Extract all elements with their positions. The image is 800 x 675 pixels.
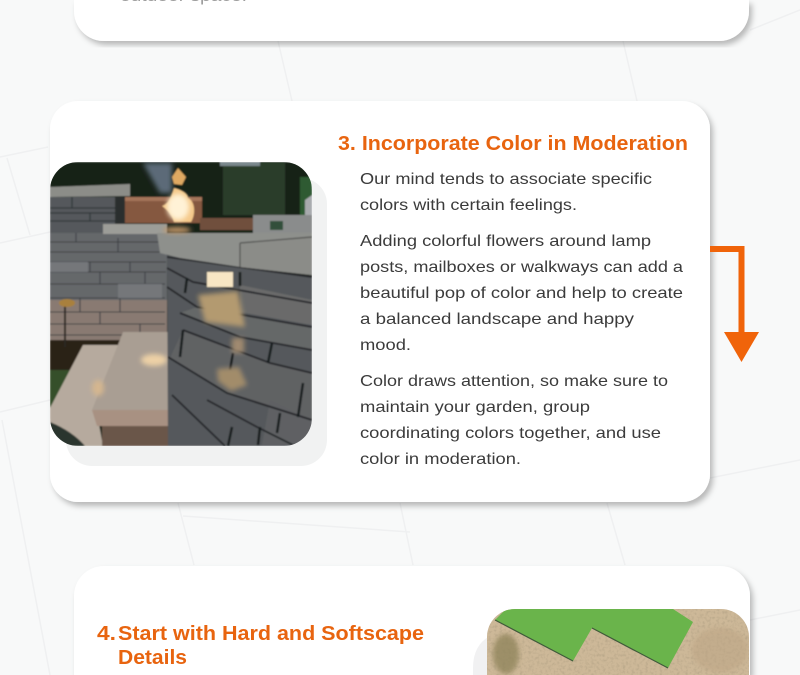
text block: flowers paragraph: Adding colorful flowers around lamp [360, 233, 651, 250]
text block: flowers paragraph: posts, mailboxes or walkways can add a [360, 259, 683, 276]
photo shadow [473, 636, 490, 675]
heading: tip 4: Details [118, 647, 187, 669]
text block: intro paragraph: colors with certain feelings. [360, 197, 577, 214]
card: previous tip (cropped) [74, 0, 749, 41]
heading: tip 4: 4. [97, 623, 116, 645]
arrow: to next tip [710, 246, 759, 362]
text block: attention paragraph: coordinating colors together, and use [360, 425, 661, 442]
photo: stone wall with fire feature at dusk [50, 162, 312, 446]
card: tip 4 [74, 566, 750, 675]
heading: tip 3: 3. Incorporate Color in Moderation [338, 133, 688, 155]
text block: attention paragraph: maintain your garden, group [360, 399, 590, 416]
heading: tip 4 [97, 623, 424, 669]
text block: intro paragraph: Our mind tends to associate specific [360, 171, 652, 188]
text block: flowers paragraph: mood. [360, 337, 411, 354]
text block: attention paragraph: color in moderation. [360, 451, 521, 468]
text block: flowers paragraph [360, 233, 683, 354]
text block: flowers paragraph: a balanced landscape and happy [360, 311, 634, 328]
text block: intro paragraph [360, 171, 652, 214]
text block: attention paragraph [360, 373, 668, 468]
text block: flowers paragraph: beautiful pop of color and help to create [360, 285, 683, 302]
photo: sod laid over bare soil [487, 609, 750, 675]
card: tip 3 [50, 101, 710, 502]
heading: tip 4: Start with Hard and Softscape [118, 623, 424, 645]
text block: attention paragraph: Color draws attention, so make sure to [360, 373, 668, 390]
photo shadow [66, 178, 327, 466]
